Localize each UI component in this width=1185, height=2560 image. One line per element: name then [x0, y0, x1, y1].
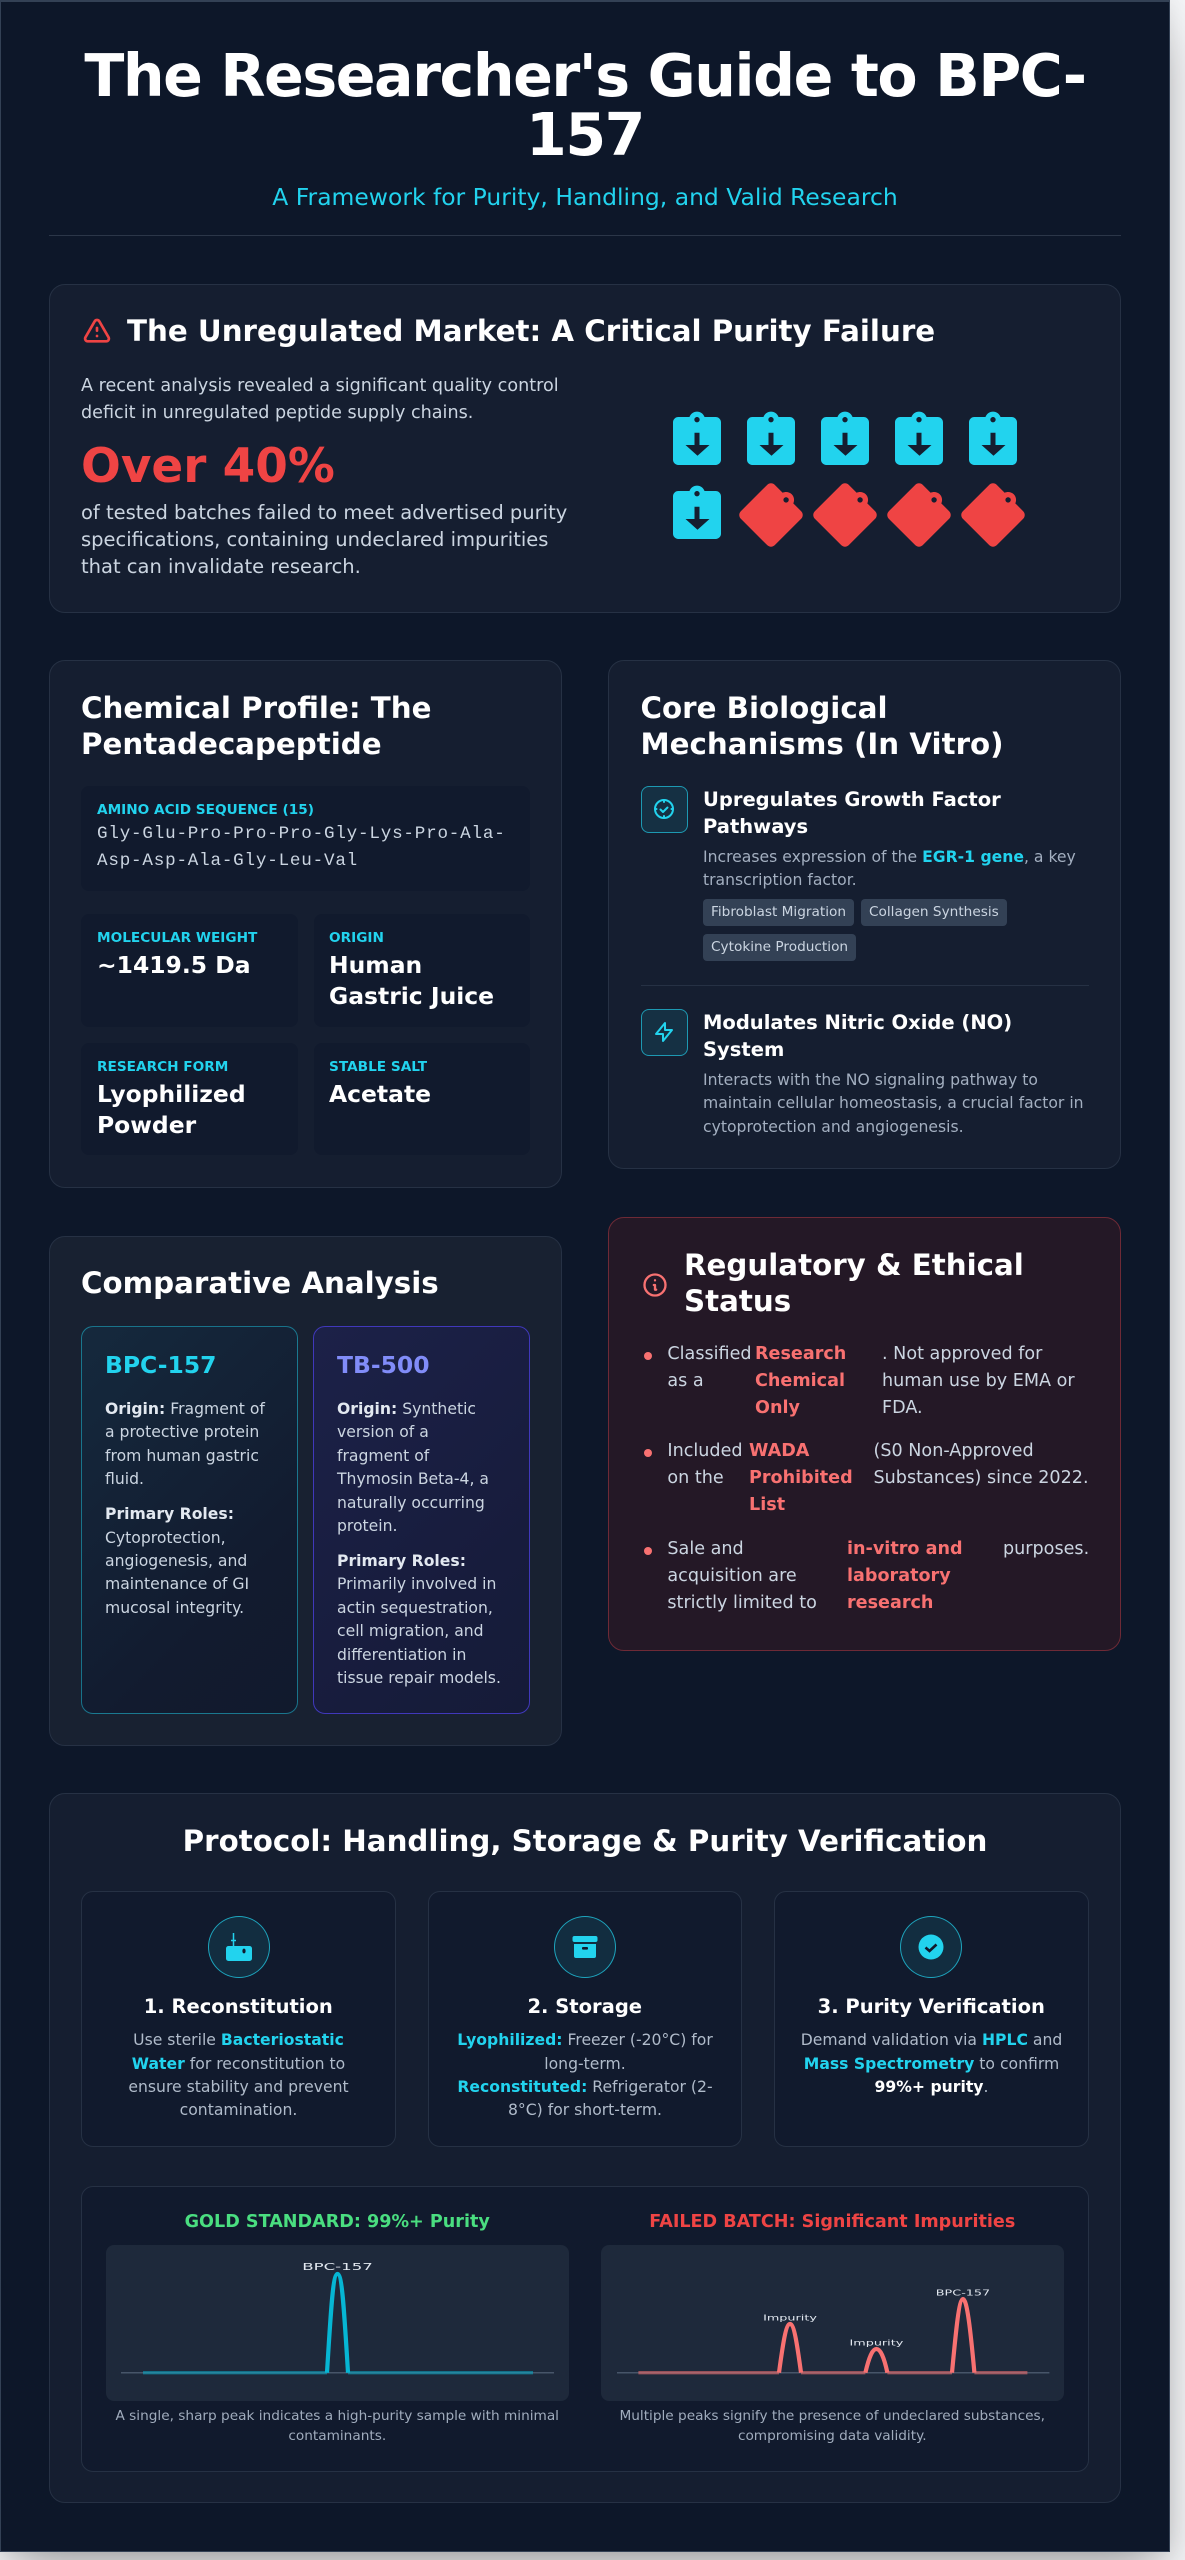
amino acid label: AMINO ACID SEQUENCE (15) [97, 802, 314, 818]
bullet 3: purposes. [1003, 1539, 1089, 1559]
BPC-157 roles: angiogenesis, and [105, 1551, 247, 1570]
bullet 1: Chemical [755, 1371, 845, 1391]
origin label: ORIGIN [329, 930, 384, 946]
bullet 1: as a [667, 1371, 704, 1391]
tag: fibroblast migration [703, 899, 854, 926]
TB-500 origin: Thymosin Beta-4, a [337, 1469, 489, 1488]
bullet 2 [644, 1441, 1089, 1515]
subtitle: A Framework for Purity, Handling, and Valid Research [272, 182, 898, 210]
failed batch heading: FAILED BATCH: Significant Impurities [649, 2212, 1015, 2232]
bullet 2: Prohibited [749, 1468, 853, 1488]
tag: collagen synthesis [861, 899, 1007, 926]
TB-500 origin: protein. [337, 1516, 398, 1535]
chart: gold standard chromatogram: BPC-157 [302, 2261, 372, 2273]
chromatogram panel [81, 2186, 1088, 2472]
bullet 3 [644, 1539, 1089, 1613]
bullet 1 [644, 1344, 1075, 1418]
BPC-157 roles: mucosal integrity. [105, 1598, 244, 1617]
TB-500 title: TB-500 [337, 1351, 430, 1379]
BPC-157 origin [105, 1399, 266, 1488]
chart: failed batch chromatogram: BPC-157 [935, 2288, 990, 2298]
intro text: A recent analysis revealed a significant quality control deficit in unregulated peptide supply chains. [81, 376, 559, 423]
step 2 text: Reconstituted: Refrigerator (2-8°C) for short-term. [457, 2077, 713, 2119]
amino acid sequence: Gly-Glu-Pro-Pro-Pro-Gly-Lys-Pro-Ala- [97, 824, 506, 844]
bullet 2: List [749, 1495, 785, 1515]
research form value [97, 1080, 246, 1139]
chart: failed batch chromatogram: Impurity [849, 2338, 903, 2348]
TB-500 origin: fragment of [337, 1446, 429, 1465]
bullet 2: WADA [749, 1441, 809, 1461]
chart: failed batch chromatogram: Impurity [763, 2313, 816, 2323]
tag: collagen synthesis: Collagen Synthesis [869, 904, 999, 920]
bullet 1: Research [755, 1344, 846, 1364]
heading: protocol: Protocol: Handling, Storage & Purity Verification [183, 1824, 987, 1858]
BPC-157 origin: Origin: Fragment of [105, 1399, 265, 1418]
step 2 text [457, 2030, 713, 2119]
heading: comparative analysis: Comparative Analysis [81, 1266, 439, 1300]
TB-500 origin [336, 1399, 489, 1535]
icon: info circle [643, 1273, 667, 1297]
TB-500 roles: cell migration, and [337, 1621, 484, 1640]
tag: fibroblast migration: Fibroblast Migration [711, 904, 846, 920]
research form box [81, 1043, 298, 1155]
stable salt label: STABLE SALT [329, 1059, 427, 1075]
bullet 1: FDA. [882, 1398, 923, 1418]
chart: failed batch chromatogram [600, 2245, 1064, 2401]
bullet 3: Sale and [667, 1539, 744, 1559]
origin value: Gastric Juice [329, 982, 494, 1010]
panel: comparative analysis [49, 1236, 562, 1746]
amino acid sequence [97, 824, 506, 871]
title [84, 42, 1086, 169]
bullet 3: laboratory [847, 1566, 951, 1586]
title: The Researcher's Guide to BPC- [84, 42, 1086, 110]
TB-500 roles: differentiation in [337, 1645, 466, 1664]
heading: unregulated market: The Unregulated Market: A Critical Purity Failure [127, 314, 935, 348]
bullet 1: human use by EMA or [882, 1371, 1075, 1391]
TB-500 roles: Primarily involved in [337, 1574, 496, 1593]
amino acid sequence: Asp-Asp-Ala-Gly-Leu-Val [97, 851, 358, 871]
icon: warning triangle [84, 318, 110, 343]
BPC-157 roles: Primary Roles: [105, 1504, 234, 1523]
title: 157 [526, 101, 644, 169]
mechanism 1 title: Upregulates Growth Factor Pathways [703, 788, 1001, 838]
BPC-157 roles [105, 1504, 249, 1617]
bullet 2: Included [667, 1441, 743, 1461]
stable salt box [314, 1043, 530, 1155]
chart: gold standard chromatogram [106, 2245, 569, 2401]
TB-500 roles: Primary Roles: [337, 1551, 466, 1570]
BPC-157 roles: maintenance of GI [105, 1574, 249, 1593]
panel: unregulated market [49, 284, 1121, 613]
BPC-157 origin: from human gastric [105, 1446, 259, 1465]
failed batch caption: Multiple peaks signify the presence of undeclared substances, compromising data validity. [619, 2408, 1045, 2444]
statistic: over 40%: Over 40% [81, 439, 335, 494]
icon: lightning bolt [641, 1009, 688, 1056]
origin value [329, 951, 494, 1010]
origin box [314, 914, 530, 1027]
bullet 1: . Not approved for [882, 1344, 1042, 1364]
bullet 1: Classified [667, 1344, 752, 1364]
panel: protocol [49, 1793, 1121, 2503]
TB-500 origin: version of a [337, 1422, 429, 1441]
bullet 2: on the [667, 1468, 724, 1488]
gold standard heading: GOLD STANDARD: 99%+ Purity [185, 2212, 490, 2232]
statistic description: of tested batches failed to meet advertised purity specifications, containing undeclared impurities that can invalidate research. [81, 501, 567, 578]
heading: core mechanisms: Core Biological Mechanisms (In Vitro) [640, 691, 1004, 761]
bullet 3: in-vitro and [847, 1539, 963, 1559]
heading: chemical profile: Chemical Profile: The Pentadecapeptide [81, 691, 431, 761]
TB-500 roles: actin sequestration, [337, 1598, 493, 1617]
BPC-157 origin: a protective protein [105, 1422, 259, 1441]
bullet 2: Substances) since 2022. [874, 1468, 1089, 1488]
molecular weight label: MOLECULAR WEIGHT [97, 930, 257, 946]
mechanism 2 title: Modulates Nitric Oxide (NO) System [703, 1011, 1012, 1061]
icon: purity check [900, 1916, 962, 1978]
panel: regulatory and ethical status [608, 1217, 1120, 1651]
step card 2 [428, 1891, 742, 2147]
research form label: RESEARCH FORM [97, 1059, 228, 1075]
panel: chemical profile [49, 660, 562, 1188]
step card 3 [774, 1891, 1088, 2147]
TB-500 roles [337, 1551, 501, 1687]
BPC-157 title: BPC-157 [105, 1351, 216, 1379]
TB-500 origin: naturally occurring [337, 1493, 485, 1512]
bullet 2: (S0 Non-Approved [874, 1441, 1034, 1461]
bullet 3: strictly limited to [667, 1593, 817, 1613]
mechanism 2 description: Interacts with the NO signaling pathway to maintain cellular homeostasis, a crucial factor in cytoprotection and angiogenesis. [703, 1070, 1084, 1136]
pictogram: batches passing versus failing [673, 412, 1025, 547]
step 3 text: Demand validation via HPLC and Mass Spectrometry to confirm 99%+ purity. [801, 2030, 1062, 2096]
research form value: Lyophilized [97, 1080, 246, 1108]
bullet 3: research [847, 1593, 933, 1613]
BPC-157 roles: Cytoprotection, [105, 1528, 226, 1547]
research form value: Powder [97, 1111, 196, 1139]
gold standard caption: A single, sharp peak indicates a high-purity sample with minimal contaminants. [116, 2408, 559, 2444]
step card 1 [81, 1891, 396, 2147]
tag: cytokine production: Cytokine Production [711, 939, 848, 955]
icon: storage box [554, 1916, 616, 1978]
comparison card: TB-500 [313, 1326, 530, 1714]
step 3 title: 3. Purity Verification [818, 1995, 1045, 2018]
bullet 3: acquisition are [667, 1566, 797, 1586]
TB-500 origin: Origin: Synthetic [337, 1399, 476, 1418]
molecular weight value: ~1419.5 Da [97, 951, 251, 979]
step 2 title: 2. Storage [527, 1995, 642, 2018]
stable salt value: Acetate [329, 1080, 431, 1108]
bullet 1: Only [755, 1398, 800, 1418]
panel: core biological mechanisms [608, 660, 1120, 1169]
step 2 text: Lyophilized: Freezer (-20°C) for long-term. [457, 2030, 713, 2073]
mechanism 1 description: Increases expression of the EGR-1 gene, a key transcription factor. [703, 847, 1076, 889]
mechanism divider [641, 985, 1089, 986]
heading: regulatory: Regulatory & Ethical Status [684, 1248, 1024, 1318]
TB-500 roles: tissue repair models. [337, 1668, 501, 1687]
amino acid sequence box [81, 786, 530, 891]
step 1 title: 1. Reconstitution [144, 1995, 333, 2018]
icon: reconstitution vial [208, 1916, 270, 1978]
step 1 text: Use sterile Bacteriostatic Water for reconstitution to ensure stability and prevent contamination. [128, 2030, 349, 2119]
molecular weight box [81, 914, 298, 1027]
icon: badge check [641, 786, 688, 833]
BPC-157 origin: fluid. [105, 1469, 144, 1488]
tag: cytokine production [703, 934, 856, 961]
header divider [49, 235, 1121, 236]
origin value: Human [329, 951, 422, 979]
comparison card: BPC-157 [81, 1326, 298, 1714]
